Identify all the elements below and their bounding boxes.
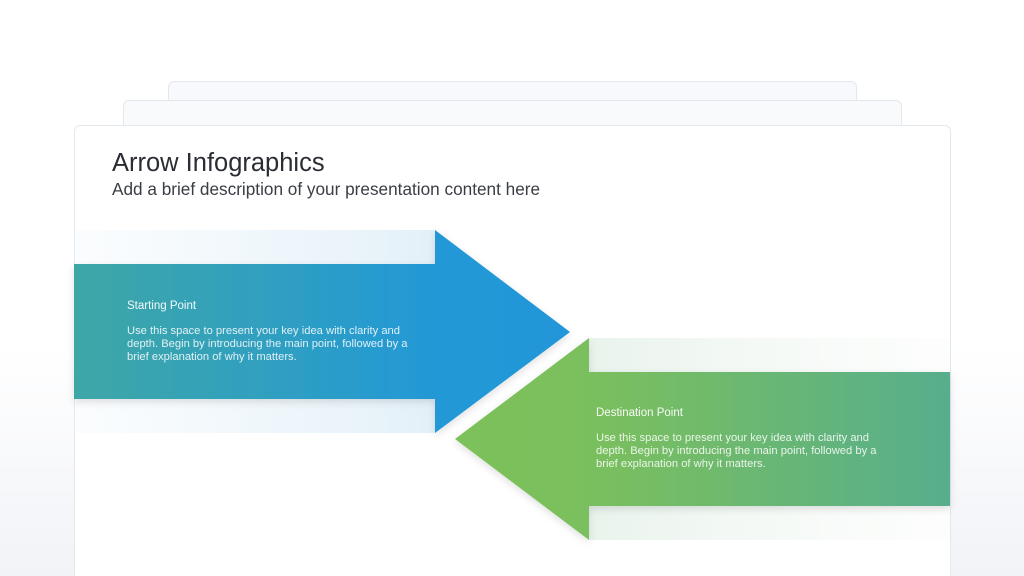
arrow 1 shadow band: [74, 230, 435, 433]
text: starting point: Starting Point: [127, 300, 196, 312]
title: Arrow Infographics: [112, 149, 325, 177]
text: destination point: Destination Point: [596, 407, 683, 419]
arrow 2: destination point: [455, 338, 950, 540]
text: starting point: [127, 300, 408, 363]
middle card: [123, 100, 902, 200]
arrow 1: starting point: [74, 230, 570, 433]
text: destination point: Use this space to present your key idea with clarity and depth. Begin by introducing the main point, followed by a brief explanation of why it matters.: [596, 432, 876, 470]
main card: [74, 125, 951, 576]
arrow 2 shadow band: [589, 338, 950, 540]
text: starting point: Use this space to present your key idea with clarity and depth. Begin by introducing the main point, followed by a brief explanation of why it matters.: [127, 325, 408, 363]
text: destination point: [596, 407, 876, 470]
subtitle: Add a brief description of your presentation content here: [112, 179, 540, 199]
back card: [168, 81, 857, 181]
